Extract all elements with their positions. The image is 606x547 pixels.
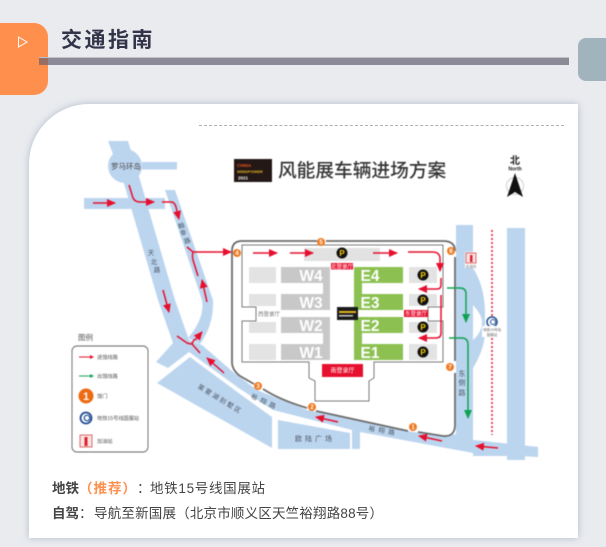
east halls: E2 [361,318,379,335]
west halls: W1 [299,345,323,362]
road labels: 裕翔路 [250,391,281,412]
west halls: W2 [299,318,323,335]
icon: metro station [482,317,502,337]
gate markers: 6 [449,249,453,255]
icon: metro station: 地铁15号线 [483,327,501,332]
gate markers: 2 [310,405,314,411]
map title: 风能展车辆进场方案 [278,160,446,181]
parking markers: P [420,296,426,305]
text: subway directions: 地铁15号线国展站 [150,481,265,496]
text: subway directions: 地铁 [52,480,79,496]
icon: gas station: 加油站 [466,264,477,268]
text: subway directions: ： [137,481,150,496]
legend: 出馆线路 [97,372,119,380]
centre logo [337,307,358,320]
road labels: 侧 [458,378,466,387]
road labels: 路 [458,388,466,397]
text: driving directions: 自驾 [52,505,79,521]
east halls: E3 [361,295,380,312]
text: subway directions [52,480,265,496]
legend: 1 [83,391,89,403]
green outbound routes [447,288,468,418]
east side service blocks [409,267,437,360]
road labels: 欧陆广场 [295,434,335,443]
road labels: 路 [154,265,161,274]
west side service blocks [249,267,276,360]
road labels: 东 [458,369,466,378]
road labels [111,161,466,443]
map logo: 2021 [238,176,249,180]
map logo: WINDPOWER [237,169,263,174]
map logo: CHINA [237,163,252,168]
legend: 进馆线路 [97,353,119,361]
legend: 馆门 [97,392,107,400]
parking markers: P [420,271,426,280]
east halls: E1 [361,345,380,362]
legend: 图例 [78,332,93,342]
red inbound routes [93,185,498,448]
dashed rule [199,125,564,126]
gate markers: 5 [319,240,323,246]
road labels: 北 [151,258,158,266]
text: driving directions: 导航至新国展（北京市顺义区天竺裕翔路88号） [94,505,383,521]
metro line 15 dotted [491,230,493,435]
east halls: E4 [361,268,380,285]
top service strip [304,248,380,261]
west halls [281,267,330,362]
icon: north compass: 北 [510,155,520,167]
gate markers: 3 [256,384,260,390]
west halls: W3 [299,295,323,312]
gate markers: 1 [411,425,415,431]
legend: 地铁15号线国展站 [97,414,139,422]
road labels: 翰 [177,220,186,231]
outer venue boundary [232,241,455,436]
gate markers [233,238,455,431]
entrance hall labels: 东登录厅 [405,310,427,318]
entrance hall labels: 西登录厅 [258,310,280,318]
icon: gas station [465,252,477,268]
road labels: 莱蒙湖别墅区 [196,382,244,416]
orange header tab [0,23,48,95]
panel: map card [29,104,578,538]
road labels: 路 [183,235,192,246]
road labels: 天 [148,249,155,257]
parking markers: P [420,348,426,357]
roads [84,141,538,460]
grey side tab [578,38,606,81]
road labels: 罗马环岛 [111,161,141,171]
icon: north compass [506,155,524,197]
map logo [234,159,272,182]
text: directions [52,480,383,521]
entrance hall labels: 南登录厅 [330,366,355,374]
play icon [18,36,28,48]
gate markers: 7 [448,365,452,371]
entrance hall labels: 北登录厅 [331,262,353,270]
road labels: 幸 [179,228,188,238]
parking markers: P [339,249,345,258]
gate markers: 4 [235,251,239,257]
header rule [39,57,569,65]
entrance hall labels [258,262,428,377]
text: driving directions: ： [79,506,92,521]
title: 交通指南 [61,29,155,52]
parking markers [336,248,428,358]
road labels: 裕翔路 [368,424,399,438]
hall outline [242,245,443,401]
west halls: W4 [299,268,323,285]
east halls [354,267,403,362]
text: subway directions: （推荐） [79,481,136,496]
legend: 加油站 [97,437,113,445]
parking markers: P [420,323,426,332]
overlap of rule on orange tab [39,58,48,65]
icon: north compass: North [508,166,522,172]
legend [72,332,148,452]
icon: metro station: 国展站 [487,332,498,337]
